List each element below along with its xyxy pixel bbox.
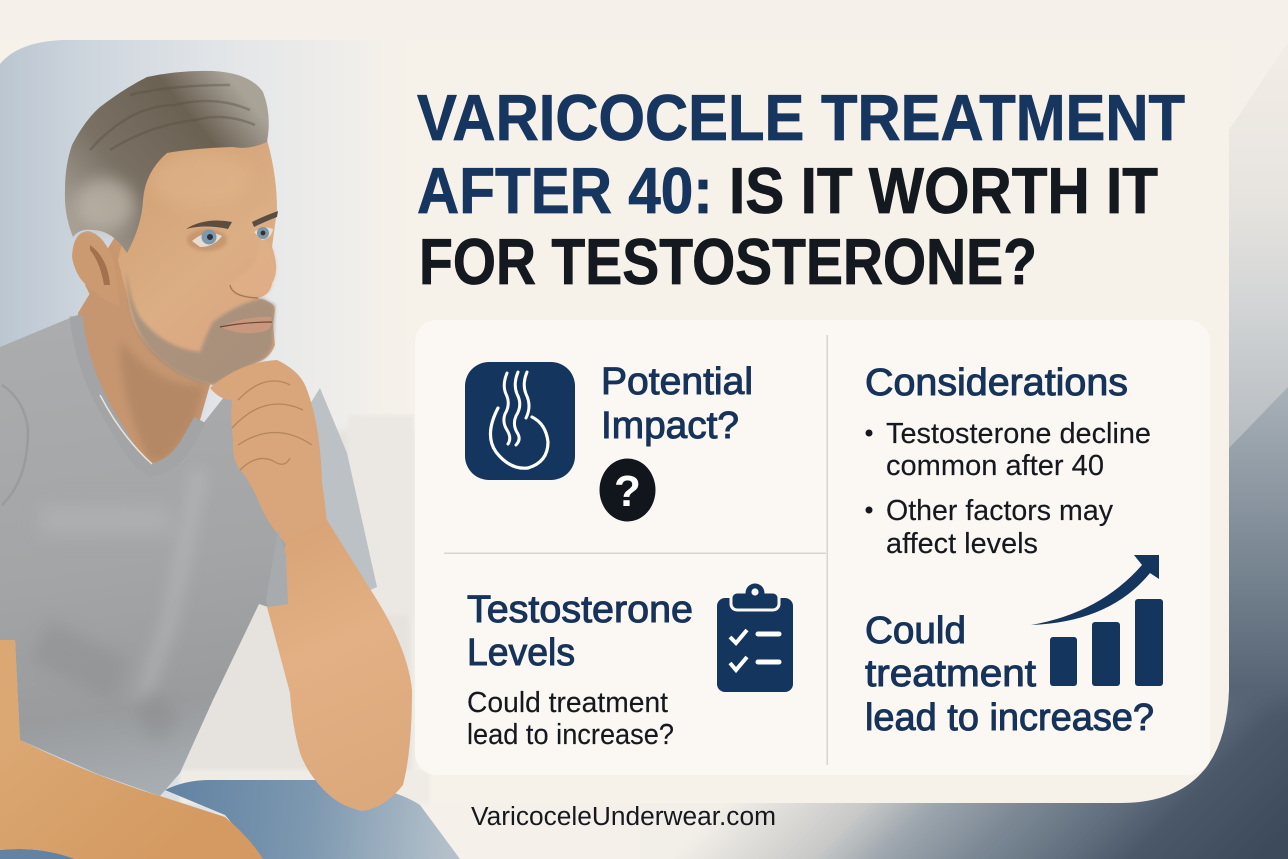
title: AFTER 40: IS IT WORTH IT — [417, 154, 1158, 227]
card corner accent — [1182, 742, 1211, 782]
bullet list: common after 40 — [886, 450, 1104, 482]
cheek highlight — [150, 152, 250, 208]
far sleeve — [300, 388, 377, 600]
callout: could treatment lead to increase: lead to increase? — [865, 697, 1154, 739]
text: could treatment lead to increase: Could treatment — [467, 687, 668, 719]
finger lines — [232, 381, 312, 470]
callout: could treatment lead to increase — [865, 610, 1154, 739]
title — [417, 81, 1185, 298]
heading: testosterone levels: Levels — [467, 632, 575, 674]
right background: upper fade — [1229, 42, 1288, 456]
hand — [210, 360, 327, 545]
hair strands — [90, 85, 255, 150]
callout: could treatment lead to increase: Could — [865, 610, 966, 652]
collar — [76, 316, 200, 470]
sleeve seam — [2, 385, 28, 505]
heading: potential impact: Potential — [601, 361, 753, 403]
icon: clipboard — [717, 584, 793, 692]
ear — [72, 231, 120, 305]
right and bottom background: dark gradient — [640, 387, 1288, 859]
sleeve foreground — [266, 530, 288, 607]
shirt — [0, 313, 300, 796]
head base — [85, 180, 205, 360]
bullet list: Testosterone decline — [886, 418, 1151, 450]
beard — [126, 270, 275, 385]
icon: question mark: ? — [614, 467, 641, 516]
heading: potential impact — [601, 361, 753, 447]
resting forearm — [267, 520, 412, 811]
shirt highlights — [40, 470, 200, 730]
icon: question mark — [600, 458, 656, 522]
title: FOR TESTOSTERONE? — [419, 225, 1037, 298]
lips — [220, 317, 272, 333]
hair — [65, 71, 269, 253]
right background: lower column — [1229, 387, 1288, 720]
bullet list — [866, 418, 1151, 560]
website: VaricoceleUnderwear.com — [471, 803, 776, 831]
bullet list: affect levels — [886, 528, 1038, 560]
heading: testosterone levels — [467, 589, 693, 674]
heading: considerations: Considerations — [865, 362, 1128, 404]
man illustration — [0, 71, 460, 859]
nose — [230, 232, 276, 297]
heading: testosterone levels: Testosterone — [467, 589, 693, 631]
face — [118, 140, 277, 385]
eyes — [187, 227, 273, 251]
icon: varicocele veins — [465, 362, 575, 480]
foreground arm — [0, 640, 263, 859]
eyebrows — [186, 221, 232, 229]
sofa background — [178, 415, 430, 804]
neck shadow — [120, 340, 205, 462]
heading: potential impact: Impact? — [601, 405, 739, 447]
bar chart with rising arrow — [1031, 555, 1163, 686]
hair side fade — [75, 179, 135, 231]
neck — [78, 290, 210, 465]
scene background — [0, 40, 440, 859]
text: could treatment lead to increase — [467, 687, 674, 751]
info panel — [415, 320, 1210, 775]
title: VARICOCELE TREATMENT — [417, 81, 1185, 154]
bullet list: Other factors may — [886, 495, 1113, 527]
text: could treatment lead to increase: lead to increase? — [467, 719, 674, 751]
callout: could treatment lead to increase: treatment — [865, 653, 1036, 695]
jeans — [0, 780, 460, 859]
